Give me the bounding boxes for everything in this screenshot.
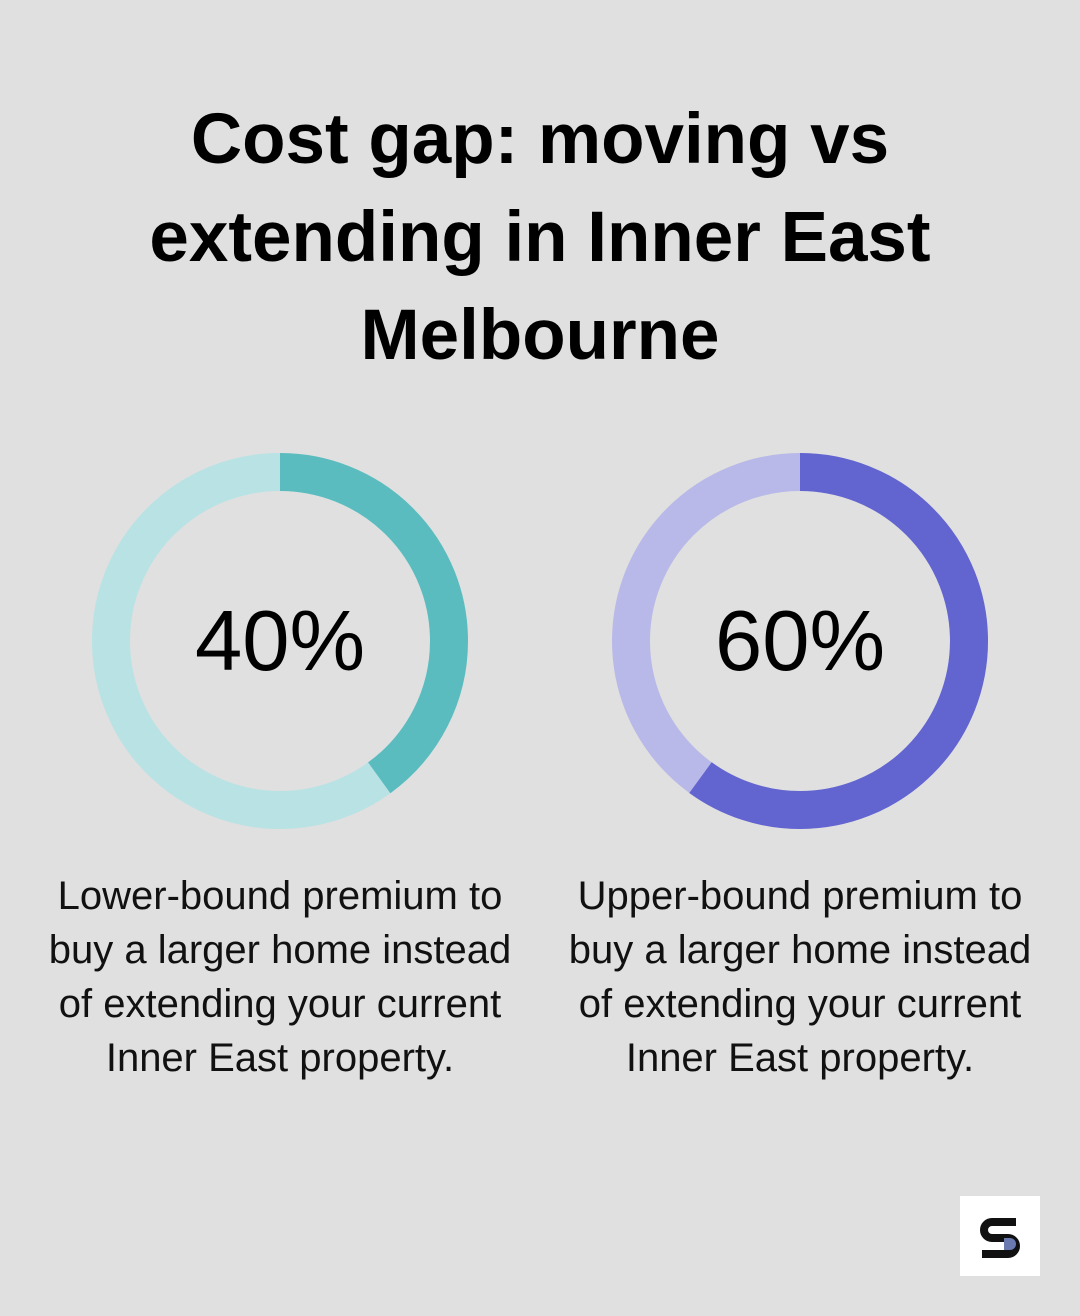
title	[149, 100, 931, 375]
caption: lower bound: of extending your current	[59, 982, 501, 1026]
caption: lower bound: buy a larger home instead	[49, 928, 511, 972]
donut chart: 40%	[92, 453, 468, 829]
donut chart: 40%: 40%	[195, 594, 365, 689]
caption: lower bound: Inner East property.	[106, 1036, 454, 1080]
donut chart: 60%	[612, 453, 988, 829]
donut chart: 60%: 60%	[715, 594, 885, 689]
caption: lower bound: Lower-bound premium to	[58, 874, 502, 918]
caption: upper bound: Upper-bound premium to	[578, 874, 1022, 918]
caption: upper bound	[569, 874, 1031, 1080]
title: extending in Inner East	[149, 198, 931, 277]
title: Cost gap: moving vs	[191, 100, 889, 179]
caption: upper bound: Inner East property.	[626, 1036, 974, 1080]
icon: logo	[960, 1196, 1040, 1276]
title: Melbourne	[361, 296, 719, 375]
caption: upper bound: of extending your current	[579, 982, 1021, 1026]
caption: lower bound	[49, 874, 511, 1080]
caption: upper bound: buy a larger home instead	[569, 928, 1031, 972]
